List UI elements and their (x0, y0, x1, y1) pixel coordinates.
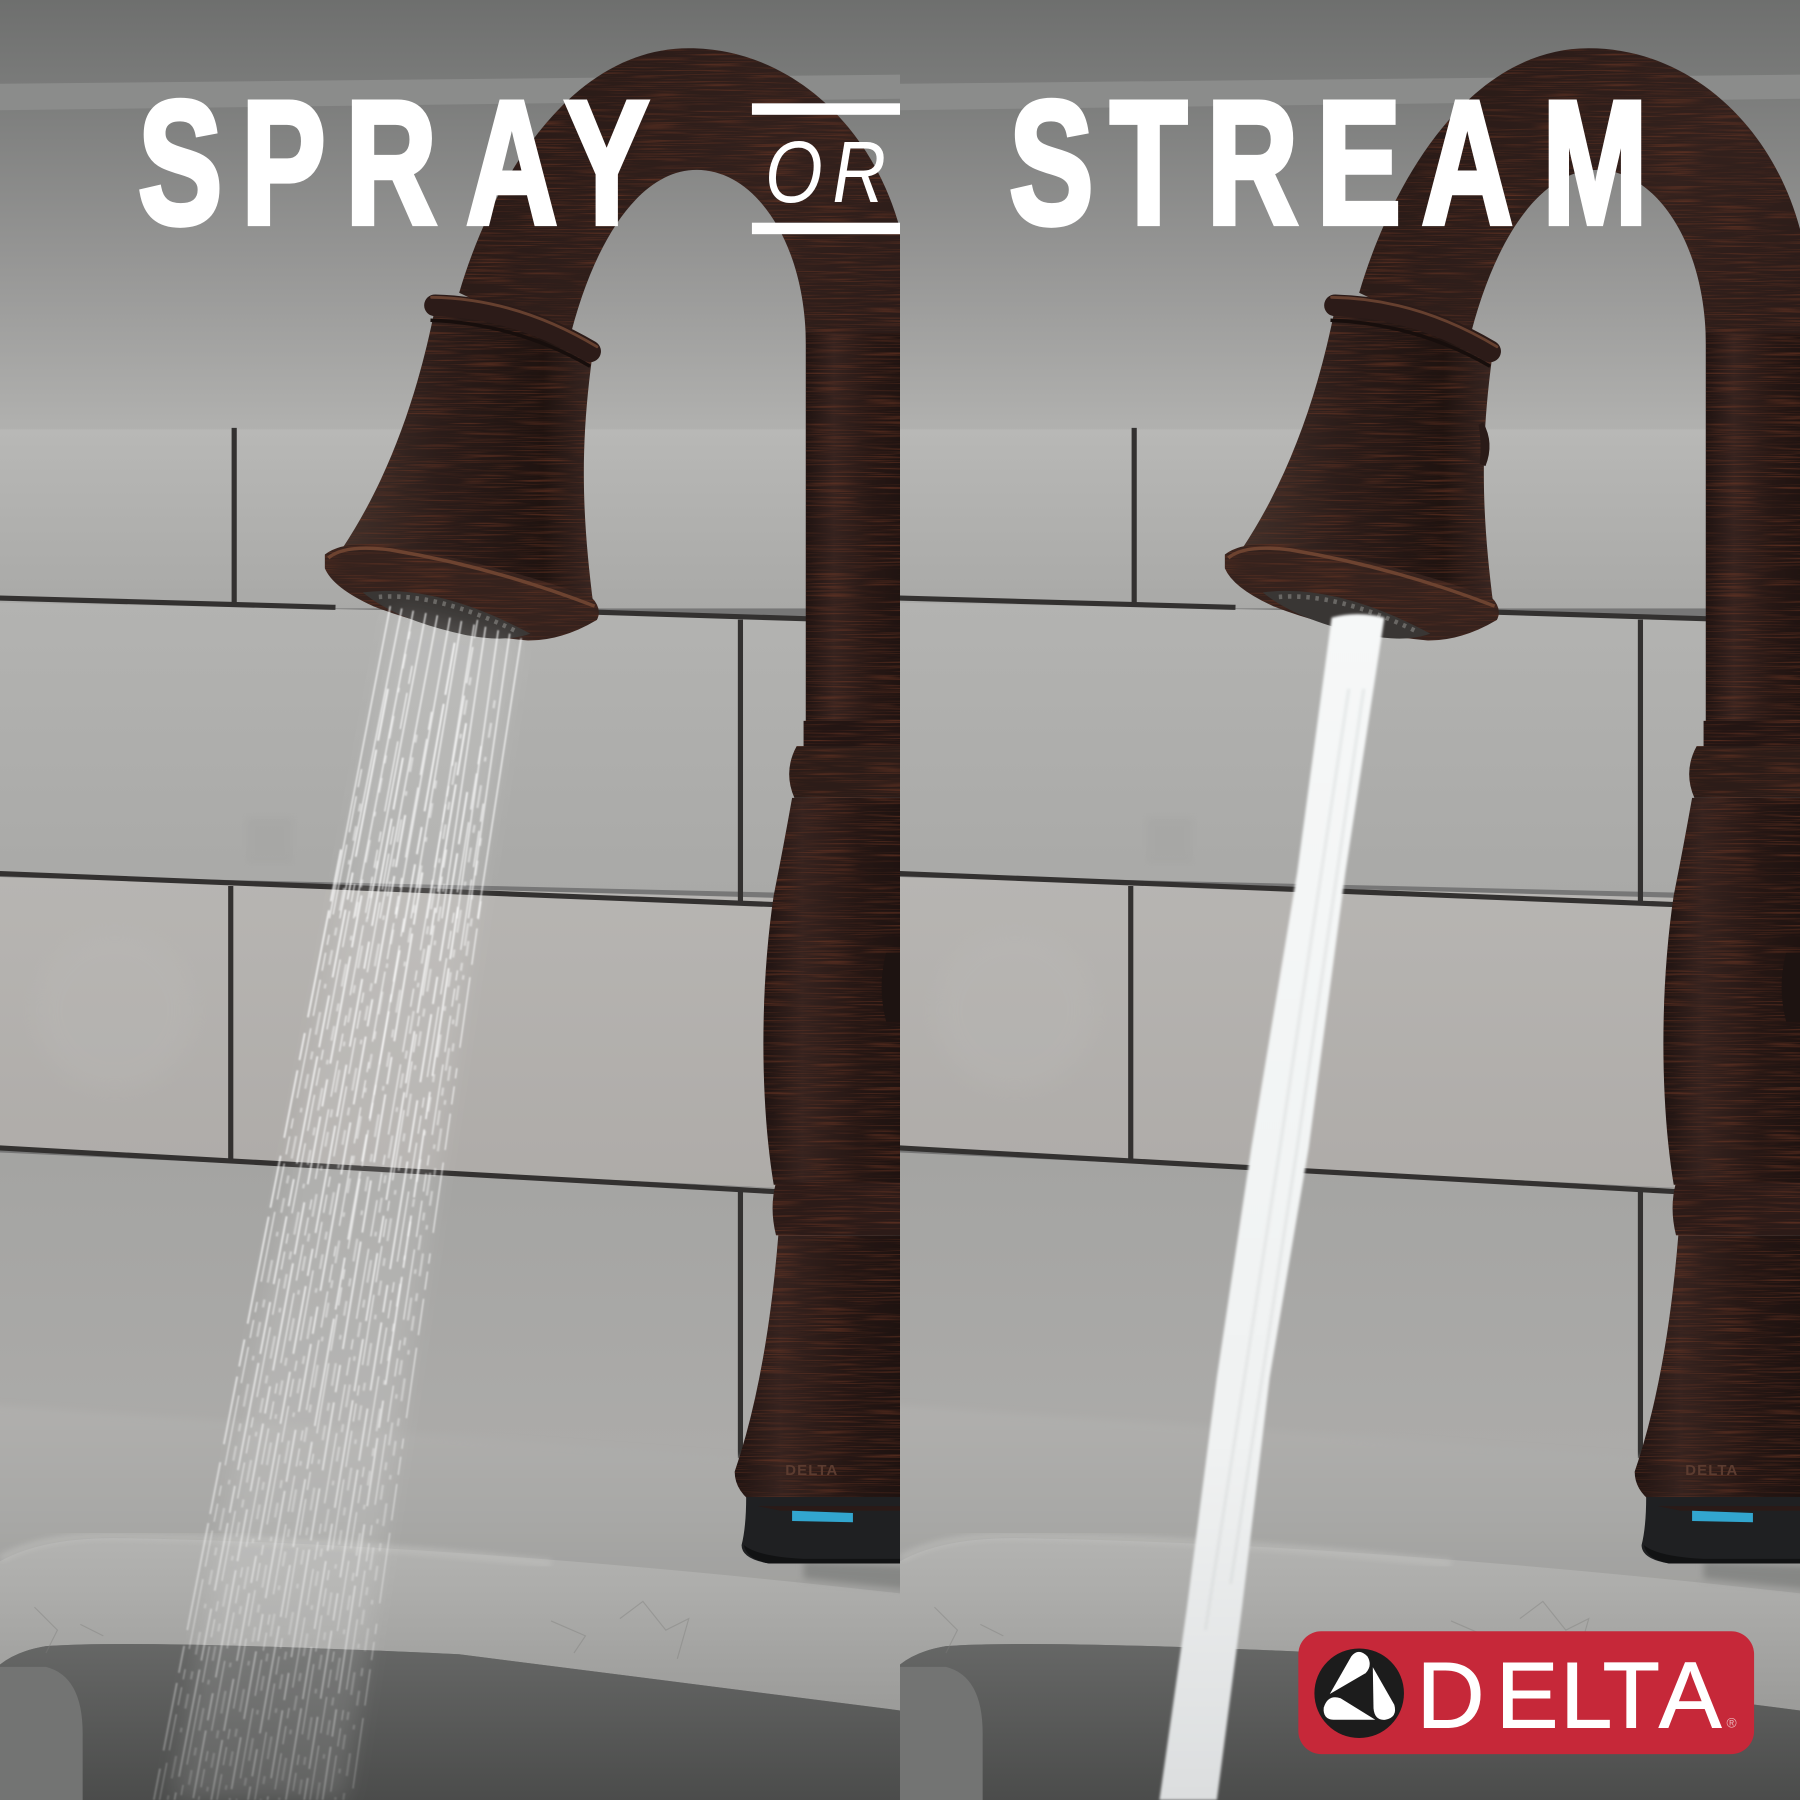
heading: OR with rules: OR (765, 124, 886, 221)
heading: STREAM: STREAM (1009, 65, 1648, 261)
registered mark: ® (1727, 1716, 1737, 1731)
faucet in stream mode (1225, 48, 1800, 1564)
panel: spray photo (0, 0, 946, 1800)
panel: stream photo (854, 0, 1800, 1800)
wall tiles and countertop background (854, 0, 1800, 1800)
heading: SPRAY: SPRAY (138, 65, 649, 261)
spray head button (1479, 422, 1490, 466)
icon: Delta circle mark (1314, 1648, 1404, 1738)
logo wordmark: DELTA (1417, 1643, 1722, 1748)
wall tiles and countertop background (0, 0, 946, 1800)
logo: Delta badge (1298, 1631, 1754, 1754)
solid stream of water (1159, 614, 1384, 1800)
faucet in spray mode (325, 48, 918, 1564)
heading: OR with rules (752, 103, 900, 234)
spray water streams (154, 606, 521, 1800)
